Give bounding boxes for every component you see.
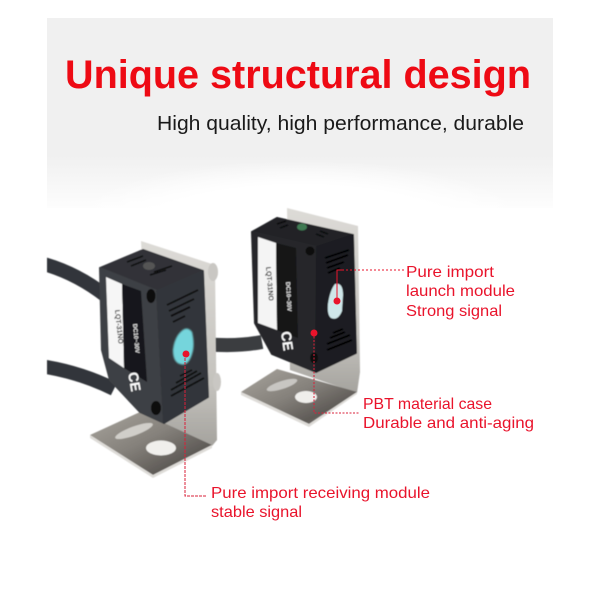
screw: right sensor upper [306, 246, 314, 256]
CE mark: right sensor: CE [278, 330, 297, 352]
vents: left sensor lower [171, 370, 204, 396]
callout text: launch module: Pure import [406, 264, 495, 281]
callout line: launch module [337, 270, 404, 301]
bracket: left sensor vertical plate [141, 241, 217, 446]
label text: model left: LQT-31NO [113, 309, 124, 345]
right sensor with bracket [205, 208, 360, 427]
callout text: launch module: launch module [406, 283, 515, 300]
callout text: PBT case [363, 396, 534, 432]
callout text: PBT case: Durable and anti-aging [363, 415, 534, 432]
callout dot: receiving module [182, 350, 190, 358]
vents: right sensor lower [327, 329, 352, 350]
label text: rating left: DC10~30V [131, 324, 140, 354]
label: left sensor [106, 277, 124, 368]
cable: right sensor [205, 342, 262, 345]
sensor body: left [100, 250, 208, 423]
vents: left sensor upper [167, 290, 198, 322]
label text: rating right: DC10~30V [284, 282, 292, 312]
callout text: receiving module: Pure import receiving module [211, 485, 430, 502]
screw: left sensor upper [146, 289, 156, 303]
screw: right sensor lower [310, 352, 318, 364]
label text: model right: LQT-31NO [264, 267, 274, 302]
vents: right sensor upper [325, 250, 349, 273]
bracket: left sensor foot [90, 412, 212, 478]
callout text: launch module [406, 264, 515, 320]
screw: left sensor lower [151, 401, 161, 415]
lens: left sensor top [143, 262, 155, 270]
callout text: PBT case: PBT material case [363, 396, 492, 413]
left sensor with bracket [40, 241, 221, 478]
window: launch module [328, 284, 343, 319]
window: receiving module [173, 329, 194, 365]
CE mark: left sensor: CE [125, 371, 144, 393]
callout dot: launch module [334, 298, 340, 304]
sensor body: right [252, 218, 356, 372]
callout text: receiving module: stable signal [211, 504, 302, 521]
bracket: right sensor foot [241, 369, 357, 427]
callout dot: PBT case [310, 330, 318, 336]
background panel [47, 18, 553, 304]
label: right sensor [258, 237, 277, 330]
bracket: right sensor vertical plate [287, 208, 360, 393]
callout text: launch module: Strong signal [406, 303, 502, 320]
cables: left sensor [40, 263, 114, 389]
callout text: receiving module [211, 485, 430, 521]
subtitle: High quality, high performance, durable [157, 113, 524, 135]
screws: left bracket [208, 263, 221, 391]
callout line: PBT case [314, 333, 360, 413]
callout line: receiving module [185, 354, 207, 496]
title: Unique structural design [65, 53, 531, 97]
lens: right sensor top [297, 224, 307, 230]
